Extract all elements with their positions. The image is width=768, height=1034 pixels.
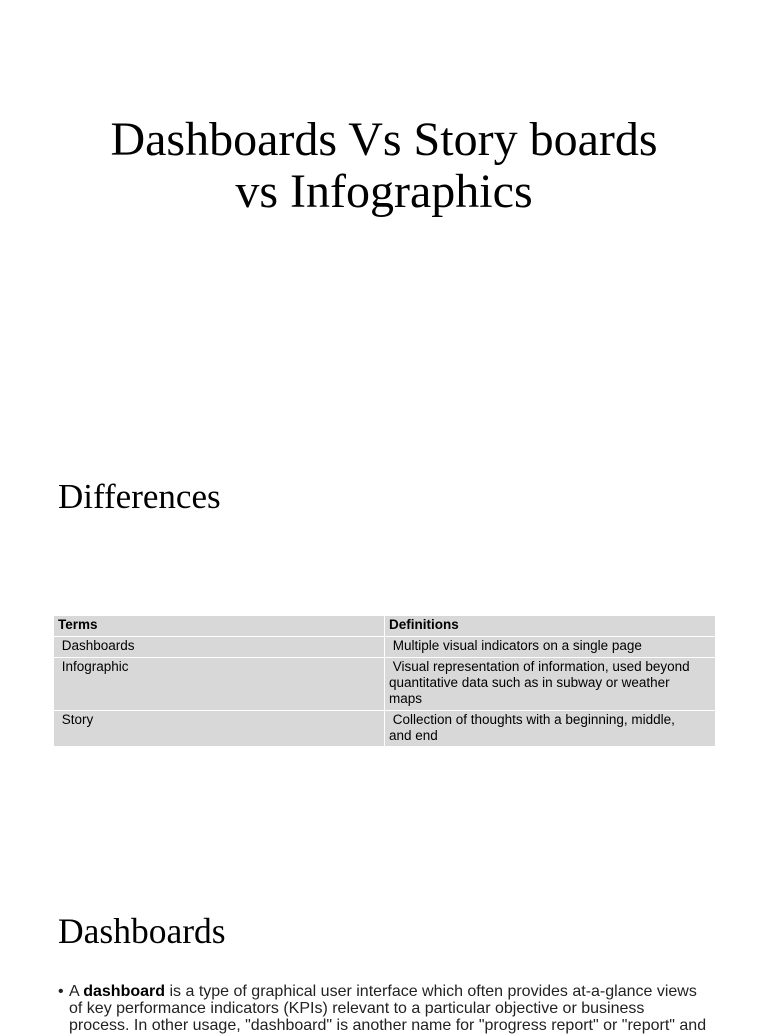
title bbox=[110, 113, 658, 218]
table: terms and definitions: Story bbox=[62, 712, 93, 727]
bullet text bbox=[58, 983, 706, 1034]
table: terms and definitions: quantitative data such as in subway or weather bbox=[389, 675, 670, 690]
bullet text: A dashboard is a type of graphical user interface which often provides at-a-glance views bbox=[69, 983, 697, 1000]
table: terms and definitions: Definitions bbox=[389, 617, 459, 632]
title: vs Infographics bbox=[235, 165, 533, 218]
table: terms and definitions: Dashboards bbox=[62, 638, 135, 653]
table: terms and definitions: Collection of thoughts with a beginning, middle, bbox=[393, 712, 675, 727]
heading: differences: Differences bbox=[58, 477, 221, 516]
table: terms and definitions: Visual representation of information, used beyond bbox=[393, 659, 690, 674]
bullet text: • bbox=[58, 983, 64, 1000]
table: terms and definitions: and end bbox=[389, 728, 438, 743]
table: terms and definitions: Terms bbox=[58, 617, 98, 632]
table: terms and definitions bbox=[54, 616, 715, 746]
bullet text: of key performance indicators (KPIs) relevant to a particular objective or business bbox=[69, 1000, 644, 1017]
bullet text: process. In other usage, "dashboard" is another name for "progress report" or "report" and bbox=[69, 1017, 706, 1034]
table: terms and definitions: Multiple visual indicators on a single page bbox=[393, 638, 642, 653]
table: terms and definitions: maps bbox=[389, 691, 422, 706]
table: terms and definitions: Infographic bbox=[62, 659, 129, 674]
title: Dashboards Vs Story boards bbox=[110, 113, 658, 166]
heading: dashboards: Dashboards bbox=[58, 911, 226, 951]
